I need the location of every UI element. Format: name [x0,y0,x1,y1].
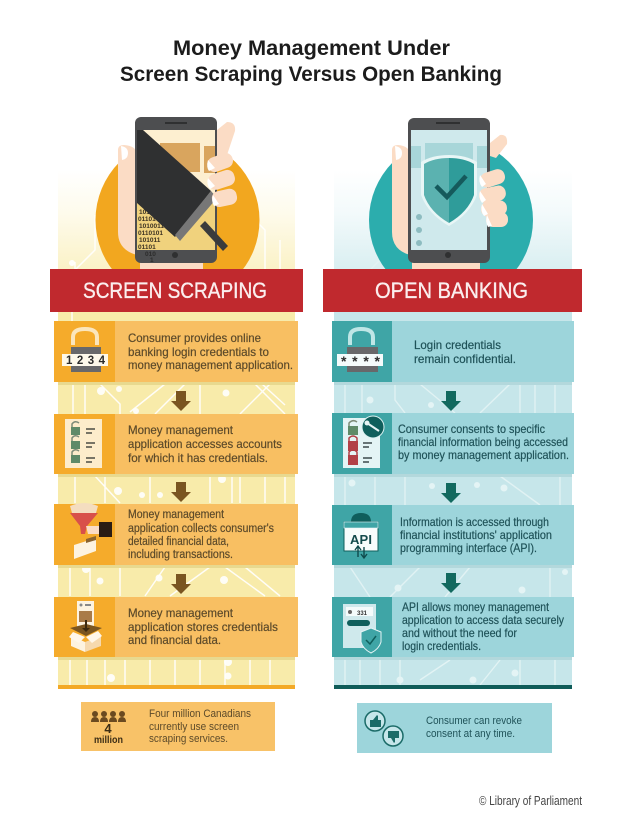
text: login credentials. [402,639,481,653]
text: and financial data. [128,633,221,647]
text: Money management [128,423,234,437]
arrow [441,391,461,411]
arrow [171,482,191,502]
text: detailed financial data, [128,536,229,548]
text: application stores credentials [128,620,278,634]
icon: padlock asterisks: **** [341,353,381,369]
text: money management application. [128,358,293,372]
arrow [171,574,191,594]
icon: checklist locks [65,419,102,468]
text [128,509,274,561]
card: step 4 [332,597,574,660]
callout: four million: million [94,734,123,746]
text: for which it has credentials. [128,451,268,465]
text [128,423,282,465]
text: application accesses accounts [128,437,282,451]
text: remain confidential. [414,352,516,366]
text [400,515,552,555]
arrow [171,391,191,411]
text: Money management [128,509,225,521]
text: Login credentials [414,338,501,352]
callout: four million: scraping services. [149,733,228,745]
icon: API window [344,513,378,558]
banner: open banking [323,269,582,312]
card: step 2 [332,413,574,477]
illustration: phone with squeegee: 0110101 [138,230,163,237]
text [398,422,569,462]
card: step 3 [332,505,574,568]
banner: screen scraping [50,269,303,312]
text [402,600,564,653]
bottom strip [58,685,295,689]
illustration: phone with squeegee: 101011 [139,237,161,244]
text: and without the need for [402,626,517,640]
card: step 2 [54,414,298,477]
icon: thumbs up [365,711,385,731]
banner: open banking: OPEN BANKING [375,278,528,303]
text: including transactions. [128,549,233,561]
illustration: phone with shield [369,118,533,302]
card: step 3 [54,503,298,568]
text [128,606,278,647]
text: programming interface (API). [400,541,537,555]
text: API allows money management [402,600,550,614]
text: application to access data securely [402,613,564,627]
icon: shield [421,155,477,226]
card: step 1 [332,321,574,385]
card: step 1 [54,321,298,385]
text [128,331,293,372]
panel: open banking [323,118,582,753]
text: Money management [128,606,234,620]
illustration: phone with squeegee: 01101 [138,216,156,223]
panel: screen scraping [50,117,303,751]
icon: people [91,711,126,722]
illustration: phone with squeegee: 101 [139,209,150,216]
callout: four million: currently use screen [149,721,239,733]
text: financial institutions' application [400,528,552,542]
illustration: phone with squeegee: 1 [150,257,154,264]
icon: bill with shield: 331 [357,611,368,617]
arrow [441,483,461,503]
title: Screen Scraping Versus Open Banking [120,63,502,86]
callout: revoke consent: consent at any time. [426,728,515,740]
bottom strip [334,685,572,689]
icon: bill with shield [343,604,381,653]
text [414,338,516,366]
icon: box with document [69,601,102,652]
callout: four million: Four million Canadians [149,708,251,720]
text: application collects consumer's [128,523,274,535]
text: by money management application. [398,448,569,462]
callout: revoke consent [357,703,552,753]
illustration: phone with squeegee: 1010011 [139,223,164,230]
illustration: phone with squeegee: 010 [145,251,156,258]
illustration: phone with squeegee: 01101 [138,244,156,251]
band background: screen scraping [58,170,295,689]
icon: funnel and folder [70,503,112,559]
text: Consumer provides online [128,331,261,345]
card: step 4 [54,597,298,660]
title [120,37,502,86]
callout: four million [81,702,275,751]
banner: screen scraping: SCREEN SCRAPING [83,278,267,303]
text: banking login credentials to [128,345,269,359]
callout: four million: 4 [104,721,112,736]
icon: padlock asterisks [337,329,383,372]
arrow [441,573,461,593]
icon: locks with key [343,416,384,468]
icon: thumbs down [383,726,403,746]
credit: © Library of Parliament [479,794,582,808]
title: Money Management Under [173,37,450,60]
illustration: phone with squeegee [96,117,260,302]
text: financial information being accessed [398,435,568,449]
icon: API window: API [350,532,372,547]
callout: revoke consent: Consumer can revoke [426,715,522,727]
text: Information is accessed through [400,515,549,529]
icon: padlock 1234 [62,329,108,372]
text: Consumer consents to specific [398,422,545,436]
icon: padlock 1234: 1234 [66,355,106,367]
band background: open banking [334,170,572,689]
